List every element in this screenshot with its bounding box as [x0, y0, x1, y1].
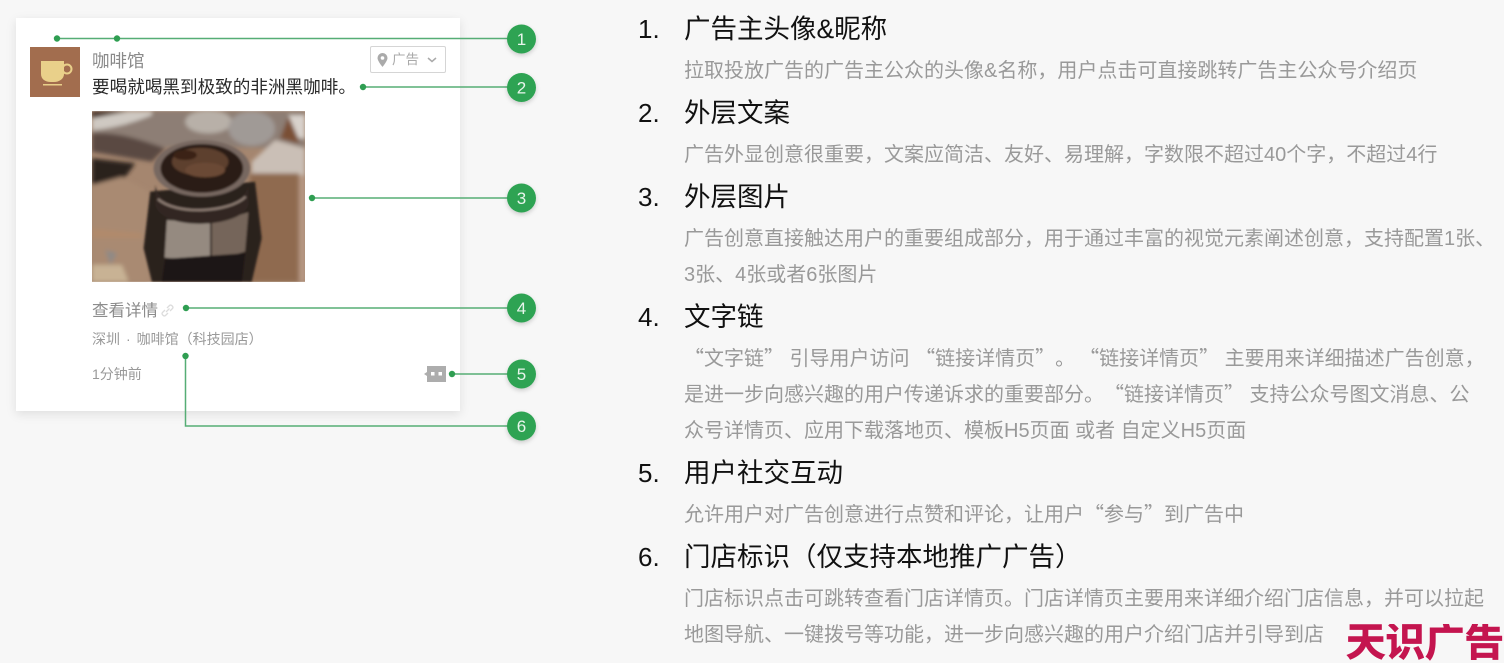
callout connectors and number badges	[54, 24, 538, 444]
icon: chain link	[162, 304, 174, 316]
heading 2: 2.	[638, 98, 660, 128]
callout 3: 3	[517, 189, 526, 208]
description 3: 广告创意直接触达用户的重要组成部分，用于通过丰富的视觉元素阐述创意，支持配置1张、	[684, 228, 1495, 250]
callout 6: 6	[517, 417, 526, 436]
heading 4	[638, 302, 764, 332]
panel: ad card	[16, 18, 460, 411]
icon: location pin	[378, 53, 388, 67]
description 3	[684, 228, 1495, 286]
callout 1: 1	[517, 30, 526, 49]
ad image: coffee grounds in moka pot	[92, 111, 305, 282]
heading 4: 4.	[638, 302, 660, 332]
description 6	[684, 588, 1484, 646]
heading 6: 6.	[638, 542, 660, 572]
heading 1: 1.	[638, 14, 660, 44]
advertiser name: 咖啡馆	[92, 51, 144, 71]
description 4: 是进一步向感兴趣的用户传递诉求的重要部分。“链接详情页” 支持公众号图文消息、公	[684, 378, 1470, 407]
heading 2	[638, 98, 790, 128]
description 2: 广告外显创意很重要，文案应简洁、友好、易理解，字数限不超过40个字，不超过4行	[684, 144, 1437, 166]
icon: comment button	[424, 366, 446, 382]
heading 1: 广告主头像&昵称	[684, 14, 887, 44]
ad copy text: 要喝就喝黑到极致的非洲黑咖啡。	[92, 77, 356, 97]
timestamp: 1分钟前	[92, 366, 142, 382]
heading 6: 门店标识（仅支持本地推广广告）	[684, 542, 1082, 572]
description 1: 拉取投放广告的广告主公众的头像&名称，用户点击可直接跳转广告主公众号介绍页	[684, 60, 1417, 82]
callout 5	[449, 360, 536, 388]
heading 5: 用户社交互动	[684, 458, 843, 488]
description 3: 3张、4张或者6张图片	[684, 264, 877, 286]
description 5: 允许用户对广告创意进行点赞和评论，让用户“参与”到广告中	[684, 498, 1244, 527]
callout 6	[182, 353, 536, 440]
badge label: 广告	[392, 52, 419, 67]
ad badge	[370, 46, 446, 73]
icon: chevron	[428, 58, 436, 62]
callout 1	[54, 24, 536, 54]
heading 4: 文字链	[684, 302, 764, 332]
avatar icon: coffee cup	[30, 47, 80, 97]
heading 2: 外层文案	[684, 98, 790, 128]
description 4: “文字链” 引导用户访问 “链接详情页”。“链接详情页” 主要用来详细描述广告创意，	[684, 342, 1485, 371]
callout 4	[183, 294, 536, 322]
callout 2	[360, 73, 536, 102]
description 4: 众号详情页、应用下载落地页、模板H5页面 或者 自定义H5页面	[684, 420, 1246, 442]
callout 4: 4	[517, 299, 526, 318]
heading 3: 3.	[638, 182, 660, 212]
heading 3	[638, 182, 790, 212]
link text: 查看详情	[92, 302, 158, 320]
description 6: 地图导航、一键拨号等功能，进一步向感兴趣的用户介绍门店并引导到店	[684, 624, 1324, 646]
description 6: 门店标识点击可跳转查看门店详情页。门店详情页主要用来详细介绍门店信息，并可以拉起	[684, 588, 1484, 610]
callout 2: 2	[517, 78, 526, 98]
description 4	[684, 342, 1485, 442]
heading 5: 5.	[638, 458, 660, 488]
callout 3	[309, 184, 536, 212]
heading 3: 外层图片	[684, 182, 790, 212]
store label: 深圳 · 咖啡馆（科技园店）	[92, 331, 263, 347]
callout 5: 5	[517, 365, 526, 384]
